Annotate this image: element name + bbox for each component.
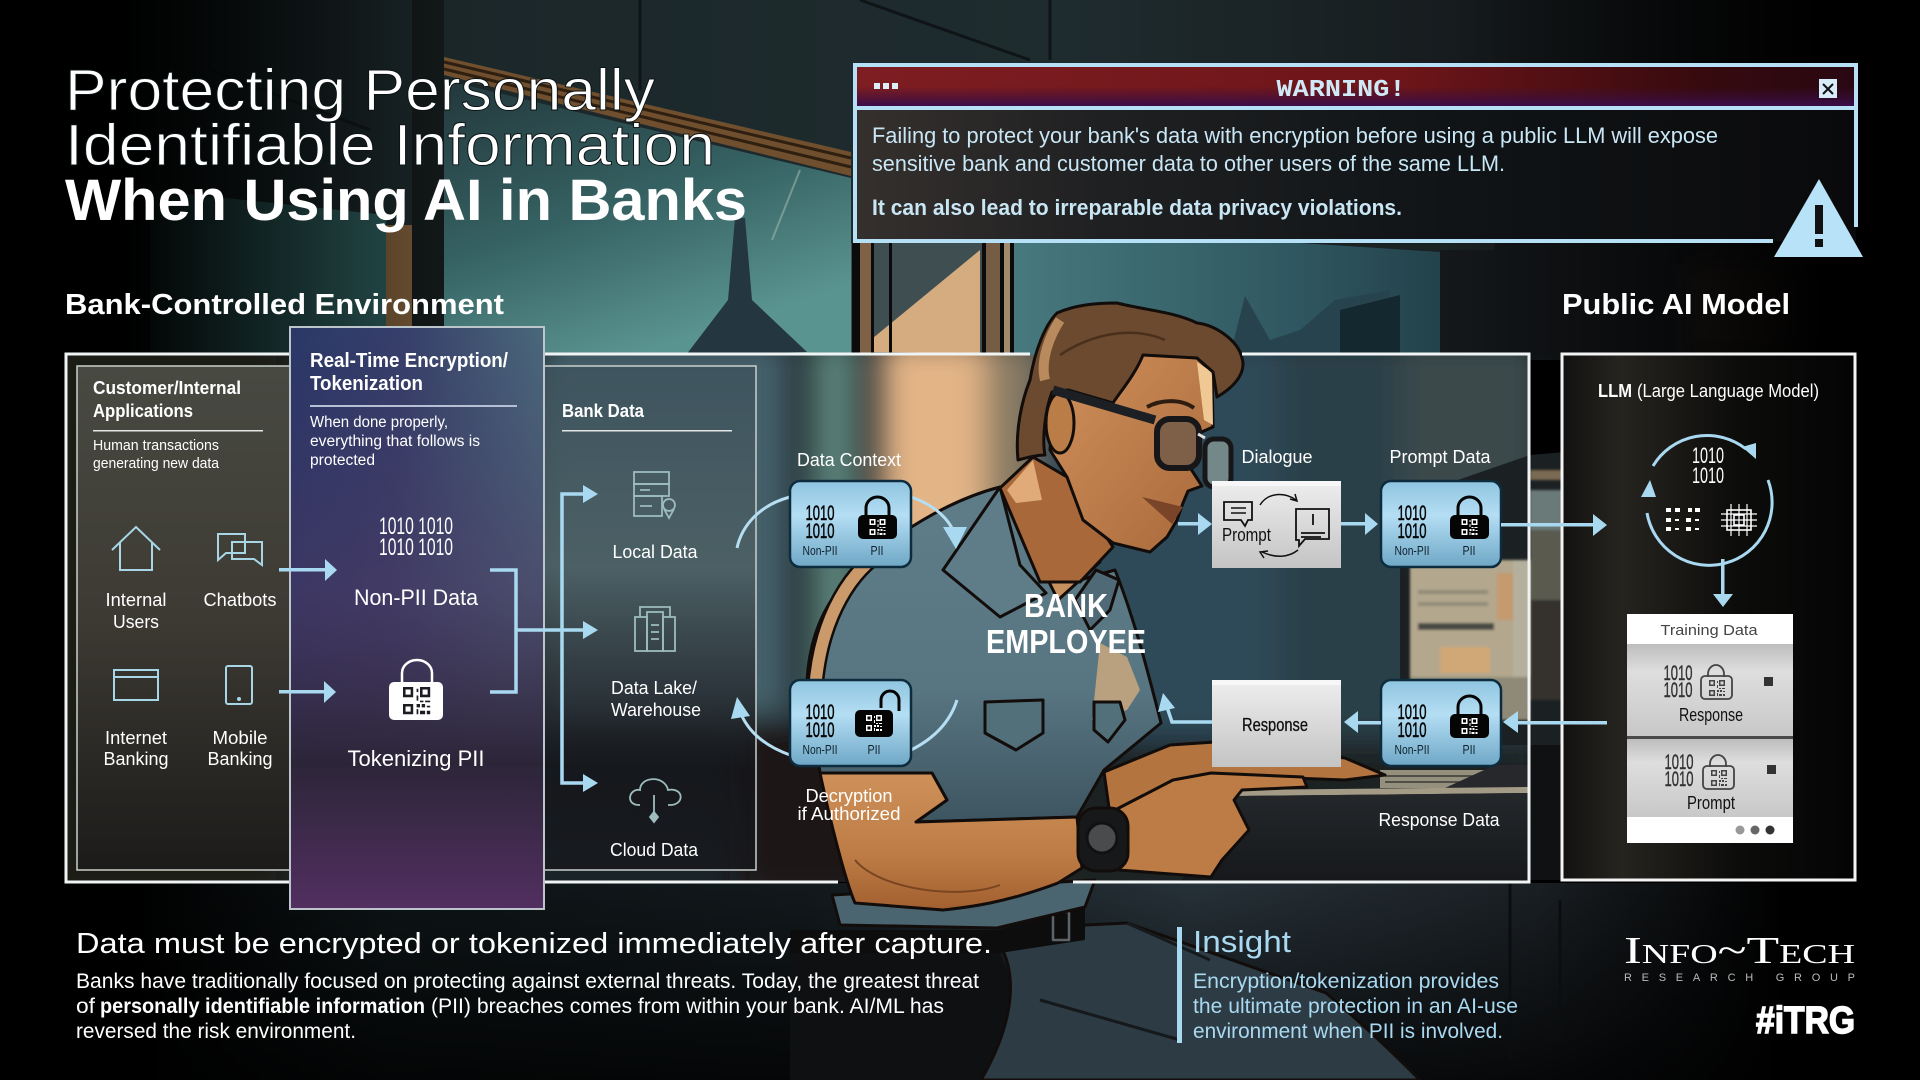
row: response training item: Response bbox=[1679, 705, 1743, 725]
panel: real-time encryption/tokenization bbox=[290, 327, 544, 909]
arrow: LLM into training data bbox=[1713, 559, 1733, 607]
title: Identifiable Information bbox=[65, 113, 715, 178]
card: prompt data encrypted: PII bbox=[1462, 544, 1476, 558]
illustration: near arm bbox=[820, 773, 1082, 910]
label: prompt: Prompt bbox=[1222, 525, 1271, 545]
illustration: shirt hem bbox=[832, 880, 1095, 928]
panel description: generating new data bbox=[93, 456, 220, 472]
illustration: far arm and hand bbox=[1104, 742, 1385, 815]
card: prompt data encrypted bbox=[1381, 481, 1501, 567]
row: response training item bbox=[1627, 644, 1793, 739]
card: prompt data encrypted: Non-PII bbox=[1394, 544, 1430, 558]
card: decryption, unlocked PII: 1010 bbox=[806, 719, 834, 742]
label: tokenizing PII: Tokenizing PII bbox=[348, 746, 484, 771]
label: dialogue: Dialogue bbox=[1242, 447, 1312, 467]
title: When Using AI in Banks bbox=[65, 168, 747, 233]
icon: window dots bbox=[874, 83, 898, 89]
label: internal users bbox=[106, 590, 166, 632]
label: non-PII data: Non-PII Data bbox=[354, 585, 479, 610]
text block: key message: of bbox=[76, 995, 95, 1018]
arrow: decryption curve in bbox=[911, 700, 957, 750]
arrows: distribution to bank data stores bbox=[562, 485, 598, 792]
label: internet banking: Internet bbox=[105, 728, 167, 748]
logo: Info-Tech Research Group: Info~Tech bbox=[1624, 930, 1855, 972]
label: cloud data: Cloud Data bbox=[610, 840, 699, 860]
text block: key message: Data must be encrypted or tokenized immediately after capture. bbox=[76, 928, 992, 960]
icon: warning triangle bbox=[1774, 179, 1863, 257]
card: data context encrypted data: 1010 bbox=[806, 520, 834, 543]
insight body: Encryption/tokenization provides bbox=[1193, 970, 1499, 993]
illustration: chest highlight bbox=[1092, 643, 1140, 720]
row: response training item: 1010 bbox=[1664, 662, 1692, 685]
icon: close button bbox=[1819, 79, 1837, 98]
label: decryption if authorized: if Authorized bbox=[798, 804, 900, 824]
callout: insight bbox=[1177, 924, 1518, 1043]
warning message: It can also lead to irreparable data privacy violations. bbox=[872, 195, 1402, 220]
card: decryption, unlocked PII: Non-PII bbox=[802, 743, 838, 757]
label: data context: Data Context bbox=[797, 450, 901, 470]
row: prompt training item: 1010 bbox=[1664, 768, 1694, 791]
icon: browser window bbox=[114, 670, 158, 700]
label: LLM large language model: (Large Language Model) bbox=[1637, 381, 1819, 401]
warning message: Failing to protect your bank's data with encryption before using a public LLM will expose bbox=[872, 123, 1718, 148]
arrow: encrypted data bracket to bank data bbox=[490, 570, 598, 692]
icon: binary data: 1010 1010 bbox=[379, 534, 453, 561]
row: prompt training item: Prompt bbox=[1687, 793, 1735, 813]
illustration: shirt pockets bbox=[985, 700, 1125, 750]
illustration: trousers bbox=[981, 923, 1420, 1080]
warning heading: WARNING! bbox=[1276, 77, 1406, 104]
heading: bank-controlled environment: Bank-Controlled Environment bbox=[65, 289, 504, 321]
panel heading: Customer/Internal bbox=[93, 378, 241, 398]
text block: key message: Banks have traditionally focused on protecting against external threats. Today, the greatest threat bbox=[76, 970, 979, 993]
insight body: environment when PII is involved. bbox=[1193, 1020, 1503, 1043]
warning message: sensitive bank and customer data to other users of the same LLM. bbox=[872, 151, 1505, 176]
arrow: LLM to response data bbox=[1503, 711, 1607, 733]
icon: data lake towers bbox=[635, 607, 675, 651]
card: decryption, unlocked PII: PII bbox=[868, 743, 880, 757]
icon: cloud bbox=[630, 779, 681, 822]
label: bank employee: EMPLOYEE bbox=[986, 623, 1146, 660]
card: data context encrypted data bbox=[790, 481, 911, 567]
label: internet banking: Banking bbox=[104, 749, 168, 769]
label: bank employee bbox=[986, 587, 1146, 660]
panel description: everything that follows is bbox=[310, 433, 480, 450]
label: LLM large language model: LLM bbox=[1598, 381, 1632, 401]
arrow: response card to response window bbox=[1344, 711, 1381, 733]
icon: cycle arrows bbox=[1260, 494, 1298, 558]
icon: wrist watch bbox=[1078, 808, 1128, 871]
icon: question speech bubble bbox=[1224, 502, 1252, 526]
arrow: data context curve in bbox=[737, 497, 790, 548]
card: data context encrypted data: Non-PII bbox=[802, 544, 838, 558]
panel heading: Tokenization bbox=[310, 373, 423, 395]
label: prompt data: Prompt Data bbox=[1390, 447, 1491, 467]
card: data context encrypted data: 1010 bbox=[806, 502, 834, 525]
label: mobile banking: Banking bbox=[208, 749, 272, 769]
text block: key message: reversed the risk environment. bbox=[76, 1020, 356, 1043]
label: decryption if authorized: Decryption bbox=[806, 786, 892, 806]
panel description bbox=[310, 414, 480, 469]
icon: mobile phone bbox=[226, 666, 252, 704]
panel heading bbox=[310, 350, 508, 395]
card: response data encrypted: 1010 bbox=[1398, 719, 1426, 742]
panel description bbox=[93, 438, 220, 472]
warning title bar bbox=[857, 67, 1854, 106]
panel heading: Bank Data bbox=[562, 401, 645, 421]
illustration: mouth bbox=[1142, 497, 1183, 524]
label: response data: Response Data bbox=[1378, 810, 1500, 830]
icon: radio tower silhouette bbox=[686, 218, 807, 355]
icon: chat bubbles bbox=[218, 534, 262, 565]
card: response data encrypted: Non-PII bbox=[1394, 743, 1430, 757]
row: prompt training item bbox=[1627, 739, 1793, 817]
label: data lake/warehouse bbox=[611, 678, 701, 720]
binary text bbox=[1692, 443, 1724, 488]
panel: training data bbox=[1627, 614, 1793, 843]
illustration: near hand bbox=[1115, 773, 1307, 877]
icon: white QR padlock bbox=[389, 660, 443, 720]
insight body bbox=[1193, 970, 1518, 1043]
label: chatbots: Chatbots bbox=[204, 590, 276, 610]
panel: dialogue prompt window bbox=[1212, 481, 1341, 568]
bank environment border bbox=[66, 354, 1529, 882]
arrow: dialogue to prompt data bbox=[1341, 513, 1378, 535]
icon: binary data bbox=[379, 513, 453, 561]
illustration: glasses bbox=[1053, 390, 1231, 487]
label: data lake/warehouse: Data Lake/ bbox=[611, 678, 697, 698]
label: internal users: Users bbox=[113, 612, 159, 632]
label: local data: Local Data bbox=[612, 542, 698, 562]
insight body: the ultimate protection in an AI-use bbox=[1193, 995, 1518, 1018]
illustration: shirt torso bbox=[807, 487, 1161, 822]
arrow: decryption curve out bbox=[731, 697, 790, 755]
card: prompt data encrypted: 1010 bbox=[1398, 502, 1426, 525]
panel: bank-controlled environment frosted backdrop bbox=[68, 355, 1528, 882]
diagram: LLM processing cycle bbox=[1641, 435, 1772, 565]
card: response data encrypted: 1010 bbox=[1398, 701, 1426, 724]
arrow: prompt data to LLM bbox=[1501, 514, 1607, 536]
illustration: shoulder highlight bbox=[815, 545, 895, 690]
icon: answer speech bubble bbox=[1296, 509, 1329, 546]
label: internal users: Internal bbox=[106, 590, 166, 610]
title: Protecting Personally bbox=[65, 58, 655, 123]
label: bank employee: BANK bbox=[1024, 587, 1108, 624]
text block: key message: (PII) breaches comes from within your bank. AI/ML has bbox=[431, 995, 944, 1018]
title bbox=[65, 58, 747, 233]
arrow: data context curve out bbox=[911, 497, 967, 549]
label: data lake/warehouse: Warehouse bbox=[611, 700, 701, 720]
illustration: eyebrow bbox=[1147, 401, 1194, 408]
row: prompt training item: 1010 bbox=[1664, 751, 1694, 774]
panel: public LLM bbox=[1562, 354, 1855, 880]
label: training data: Training Data bbox=[1660, 622, 1758, 639]
label: response: Response bbox=[1242, 715, 1308, 735]
text block: key message: personally identifiable information bbox=[100, 995, 425, 1018]
panel description: Human transactions bbox=[93, 438, 219, 454]
illustration: ear bbox=[1046, 393, 1074, 453]
label: mobile banking: Mobile bbox=[212, 728, 268, 748]
illustration: belt bbox=[790, 907, 1085, 953]
arrow: response window to employee bbox=[1158, 693, 1212, 722]
illustration: monitor and desk bbox=[1180, 452, 1565, 882]
logo: #iTRG: #iTRG bbox=[1756, 1000, 1855, 1042]
arrow: PII sources into encryption bbox=[279, 681, 336, 703]
icon: local server with pin bbox=[634, 472, 675, 518]
card: response data encrypted bbox=[1381, 680, 1501, 766]
icon: house bbox=[112, 527, 160, 570]
logo: Info-Tech Research Group bbox=[1624, 930, 1855, 984]
pagination dots bbox=[1736, 826, 1774, 834]
arrow: non-PII sources into encryption bbox=[279, 559, 337, 581]
card: decryption, unlocked PII bbox=[790, 680, 911, 766]
label: decryption if authorized bbox=[798, 786, 900, 824]
illustration: face bbox=[1050, 352, 1213, 552]
heading: public AI model: Public AI Model bbox=[1562, 289, 1790, 321]
illustration: collar bbox=[943, 480, 1119, 630]
illustration: neck bbox=[1000, 457, 1113, 582]
warning message bbox=[872, 123, 1718, 220]
illustration: chair bbox=[790, 953, 1020, 1080]
panel description: When done properly, bbox=[310, 414, 448, 431]
binary text: 1010 bbox=[1692, 443, 1724, 468]
window frame and tan wall bbox=[851, 243, 1014, 356]
card: decryption, unlocked PII: 1010 bbox=[806, 701, 834, 724]
panel: customer/internal applications bbox=[77, 366, 290, 870]
label: mobile banking bbox=[208, 728, 272, 769]
card: response data encrypted: PII bbox=[1462, 743, 1476, 757]
logo: Info-Tech Research Group: RESEARCH GROUP bbox=[1624, 972, 1855, 984]
icon: data grid bbox=[1666, 508, 1700, 531]
arrow: employee to dialogue bbox=[1178, 513, 1212, 535]
illustration: hair bbox=[1017, 303, 1243, 460]
row: response training item: 1010 bbox=[1664, 679, 1692, 702]
panel: warning dialog bbox=[855, 65, 1863, 257]
panel: bank data bbox=[544, 366, 756, 870]
icon: binary data: 1010 1010 bbox=[379, 513, 453, 540]
insight heading: Insight bbox=[1193, 924, 1291, 959]
panel heading: Real-Time Encryption/ bbox=[310, 350, 508, 372]
label: internet banking bbox=[104, 728, 168, 769]
illustration: bank employee figure bbox=[790, 303, 1420, 1080]
panel description: protected bbox=[310, 452, 375, 469]
panel heading bbox=[93, 378, 241, 421]
text block: key message bbox=[76, 928, 992, 1043]
icon: open padlock bbox=[855, 691, 899, 737]
panel heading: Applications bbox=[93, 401, 193, 421]
card: data context encrypted data: PII bbox=[870, 544, 884, 558]
icon: processor chip bbox=[1721, 504, 1757, 536]
card: prompt data encrypted: 1010 bbox=[1398, 520, 1426, 543]
panel: response window bbox=[1212, 680, 1341, 767]
binary text: 1010 bbox=[1692, 463, 1724, 488]
